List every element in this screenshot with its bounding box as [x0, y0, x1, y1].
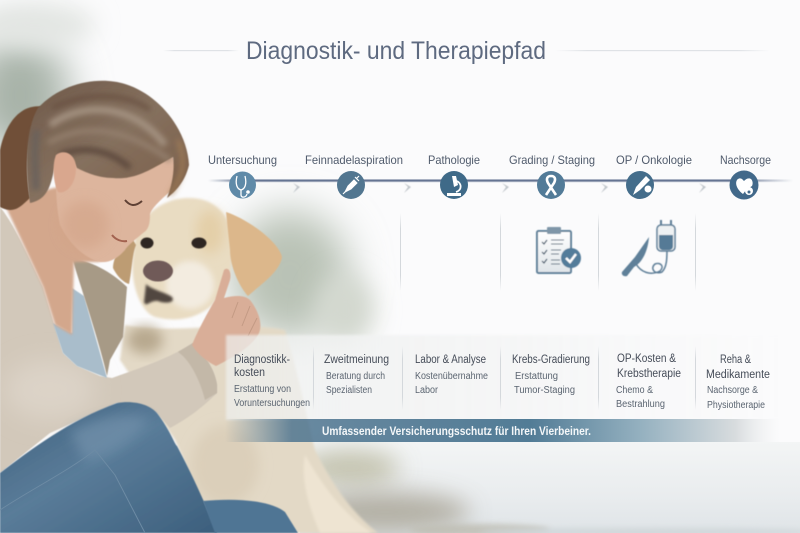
step: Nachsorge: Nachsorge — [720, 153, 771, 167]
column: Reha und Medikamente: Nachsorge & — [707, 385, 758, 396]
column: Labor und Analyse: Labor & Analyse — [415, 354, 486, 366]
step: Untersuchung — [208, 153, 277, 198]
column: Zweitmeinung: Beratung durch — [326, 371, 385, 382]
fingers — [232, 302, 257, 336]
step: Feinnadelaspiration — [305, 153, 403, 199]
ear — [54, 152, 76, 193]
column: Reha und Medikamente: Medikamente — [706, 369, 770, 381]
cardigan — [0, 207, 217, 473]
column: Diagnostikkosten — [234, 354, 310, 409]
banner — [225, 419, 780, 442]
column: Diagnostikkosten: Diagnostikk- — [234, 354, 290, 366]
icon: scalpel and infusion bag — [622, 220, 675, 276]
jeans — [0, 402, 217, 533]
hair — [27, 81, 189, 203]
timeline chevrons — [293, 183, 706, 193]
shirt — [53, 288, 107, 378]
photo: woman hugging dog — [0, 81, 378, 533]
column: Krebs-Gradierung — [512, 354, 590, 396]
lips — [112, 235, 127, 241]
step: Pathologie: Pathologie — [428, 153, 480, 167]
panel: insurance coverage — [226, 335, 786, 420]
icon: clipboard with checkmark — [537, 227, 581, 273]
step: Nachsorge — [720, 153, 771, 200]
column: Diagnostikkosten: kosten — [234, 367, 265, 379]
dog mouth — [144, 284, 173, 304]
title rule left — [163, 50, 239, 51]
step: Pathologie — [428, 153, 480, 199]
column: Zweitmeinung — [324, 354, 389, 396]
step: OP / Onkologie — [616, 153, 692, 199]
dog eyes — [140, 238, 154, 248]
banner: Umfassender Versicherungsschutz für Ihren Vierbeiner. — [322, 426, 591, 438]
column: Zweitmeinung: Zweitmeinung — [324, 354, 389, 366]
column: Diagnostikkosten: Erstattung von — [234, 384, 291, 395]
column: Labor und Analyse: Kostenübernahme — [415, 371, 488, 382]
column: OP-Kosten und Krebstherapie: OP-Kosten & — [617, 353, 676, 365]
dog body — [120, 325, 378, 533]
step: Feinnadelaspiration: Feinnadelaspiration — [305, 153, 403, 167]
step: Untersuchung: Untersuchung — [208, 153, 277, 167]
hand — [192, 269, 260, 366]
column: Zweitmeinung: Spezialisten — [326, 385, 372, 396]
closed eye — [125, 200, 142, 205]
column: Krebs-Gradierung: Krebs-Gradierung — [512, 354, 590, 366]
column: Labor und Analyse: Labor — [415, 385, 439, 396]
column: Labor und Analyse — [415, 354, 488, 396]
lapel — [72, 258, 127, 376]
title rule right — [555, 50, 770, 51]
column: Reha und Medikamente: Physiotherapie — [707, 400, 765, 411]
upper column dividers — [400, 213, 696, 291]
column: Krebs-Gradierung: Tumor-Staging — [514, 385, 575, 396]
title: Diagnostik- und Therapiepfad — [246, 37, 546, 65]
column: Diagnostikkosten: Voruntersuchungen — [234, 398, 310, 409]
dog left ear — [113, 238, 136, 284]
column: Krebs-Gradierung: Erstattung — [515, 371, 558, 382]
timeline line — [208, 180, 793, 182]
column: OP-Kosten und Krebstherapie — [616, 353, 681, 410]
dog head — [132, 198, 233, 319]
dog chest shadow — [127, 326, 163, 354]
dog right ear — [226, 212, 282, 296]
timeline — [208, 153, 793, 200]
step: OP / Onkologie: OP / Onkologie — [616, 153, 692, 167]
column: OP-Kosten und Krebstherapie: Krebstherapie — [617, 368, 681, 380]
column: Reha und Medikamente: Reha & — [720, 354, 751, 366]
panel background — [226, 335, 786, 420]
neck — [5, 187, 100, 335]
ponytail — [0, 106, 45, 210]
column: OP-Kosten und Krebstherapie: Bestrahlung — [616, 399, 665, 410]
step: Grading / Staging: Grading / Staging — [509, 153, 595, 167]
hair strands — [35, 96, 183, 195]
dog nose — [143, 260, 173, 282]
face — [56, 140, 176, 262]
column: OP-Kosten und Krebstherapie: Chemo & — [616, 385, 653, 396]
column: Reha und Medikamente — [706, 354, 770, 411]
panel dividers — [313, 346, 696, 410]
step: Grading / Staging — [509, 153, 595, 199]
